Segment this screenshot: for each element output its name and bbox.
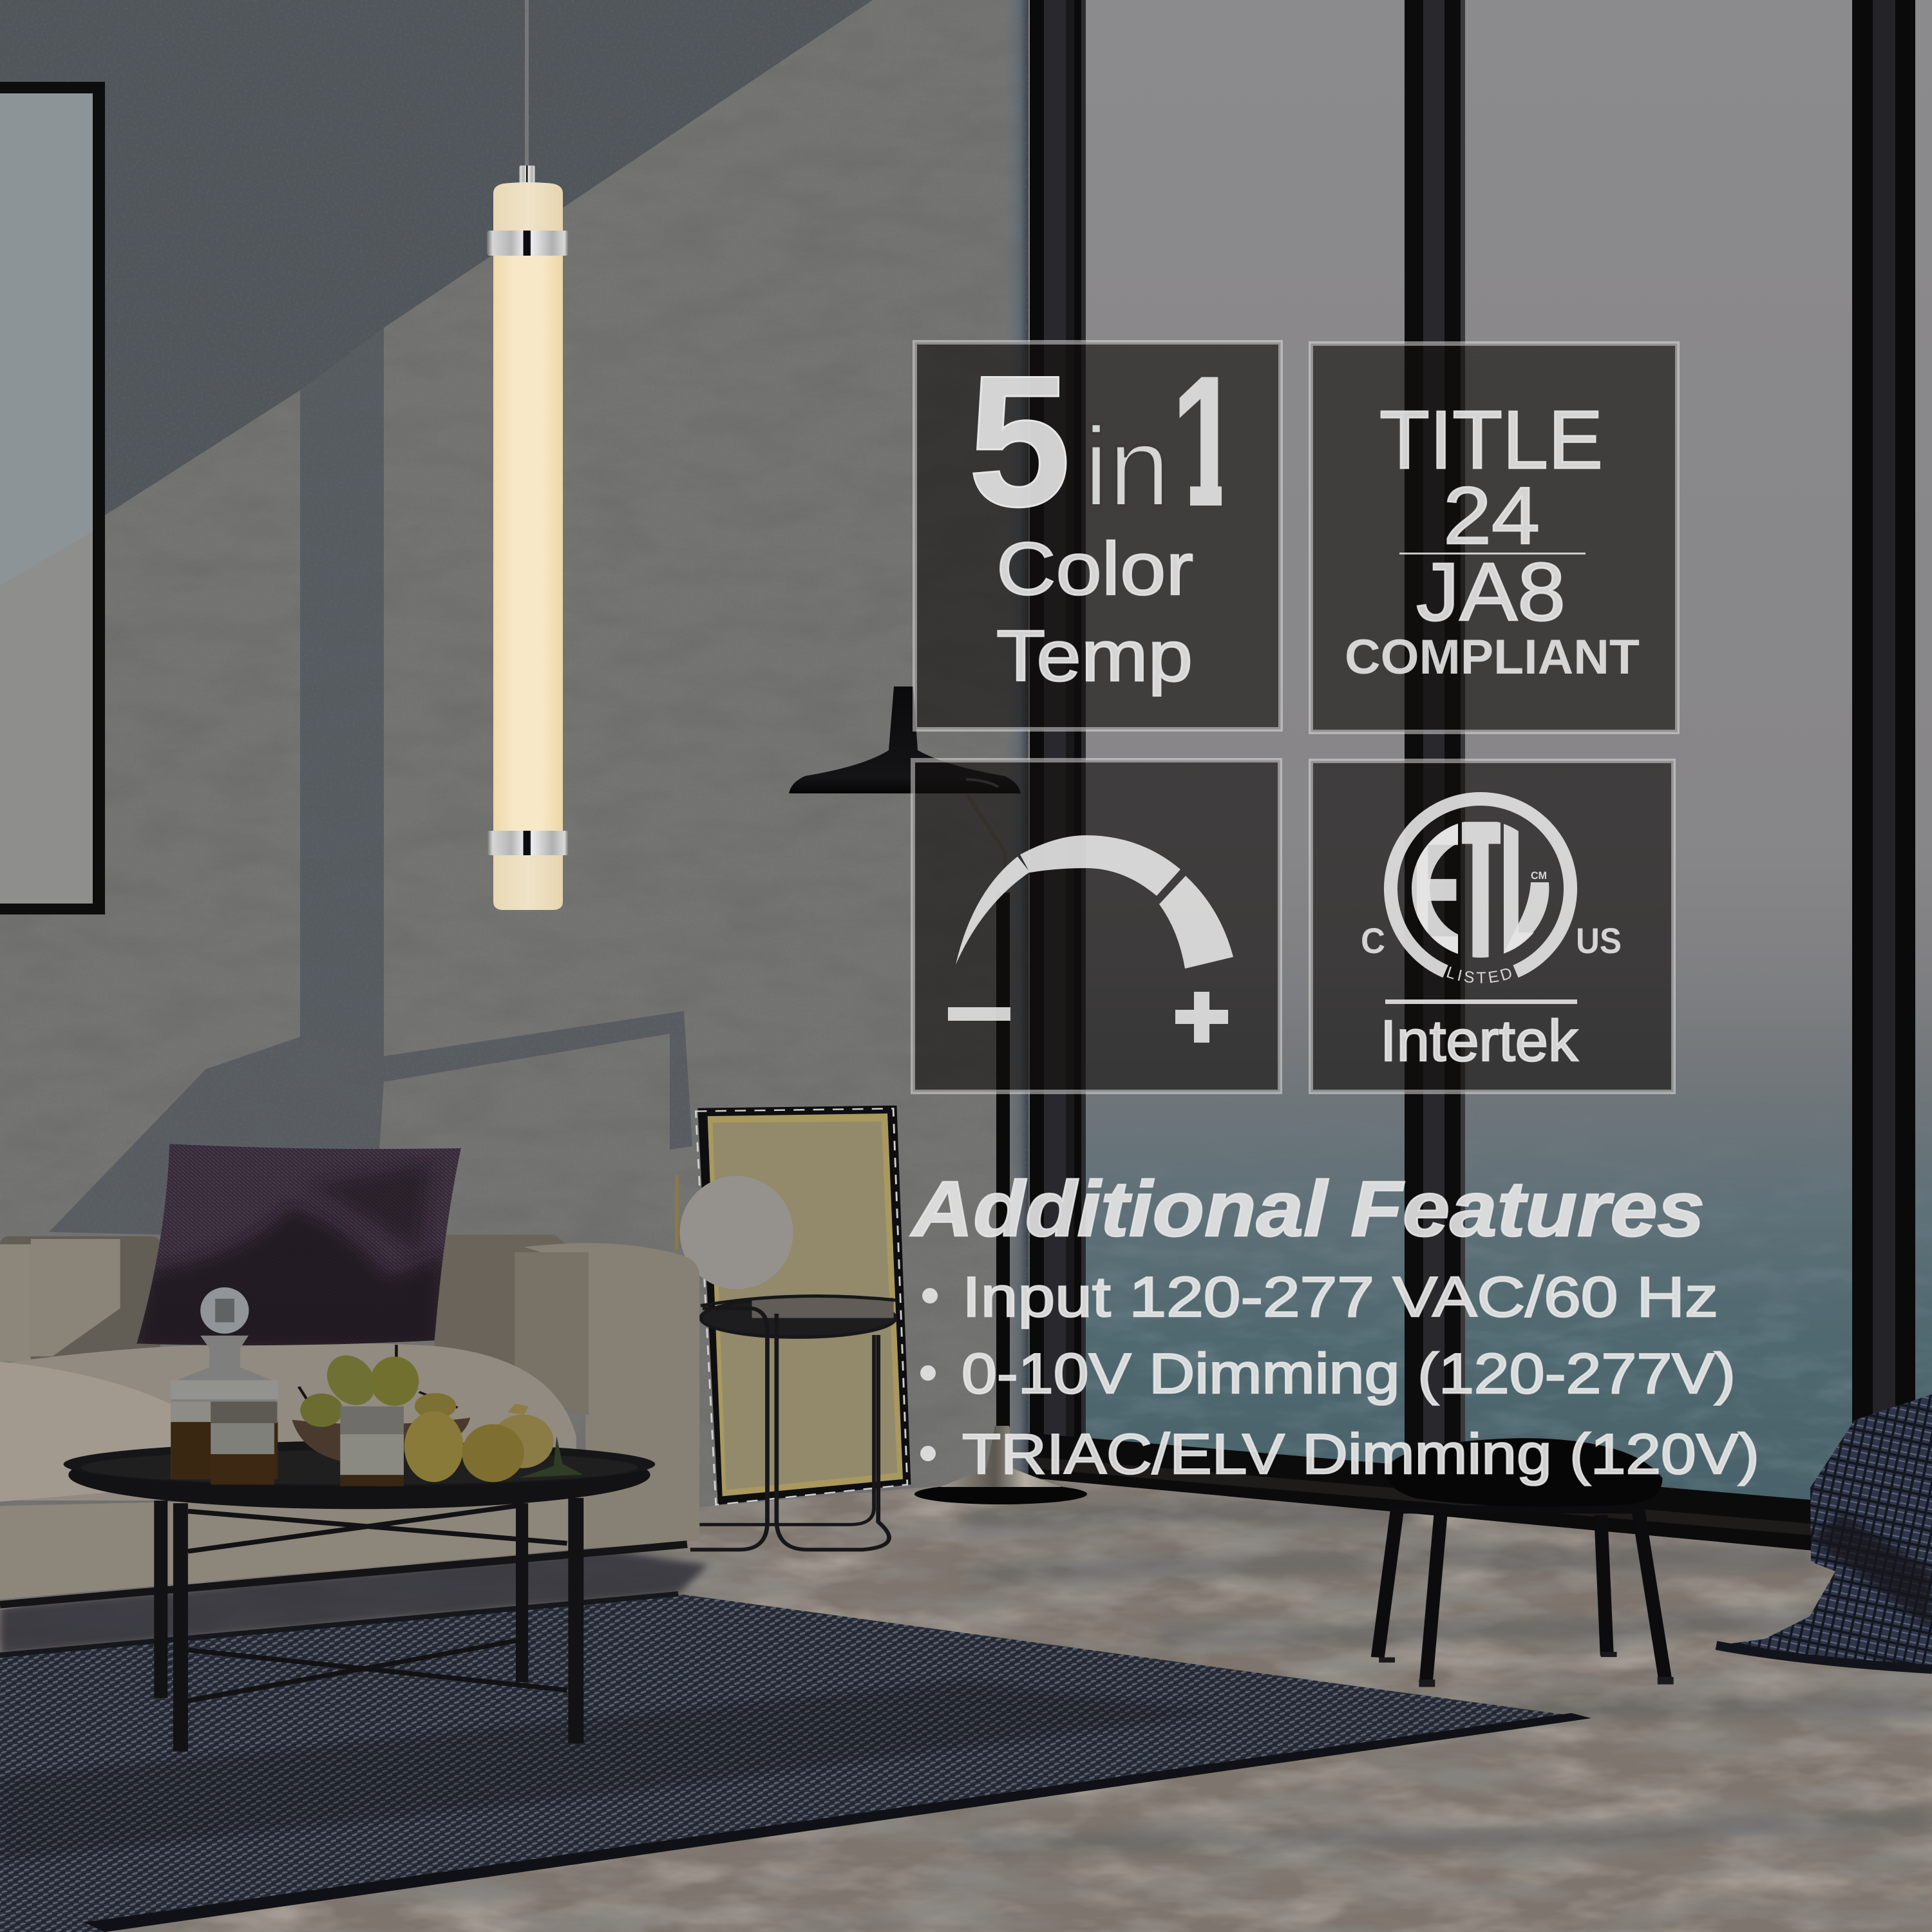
- panel: title 24 ja8 compliant: [1311, 344, 1677, 732]
- label: c: C: [1361, 920, 1385, 961]
- heading: 5 in 1: in: [1084, 404, 1170, 530]
- label: color temp: Temp: [996, 616, 1193, 696]
- panel: 5 in 1 color temp: [914, 337, 1280, 729]
- heading: 5 in 1: 1: [1171, 337, 1242, 545]
- coffee table: [64, 1441, 655, 1752]
- globe table lamp: [675, 1175, 793, 1289]
- icon: etl logo: T: [1446, 779, 1515, 1001]
- feature: input voltage: Input 120-277 VAC/60 Hz: [962, 1265, 1718, 1329]
- fruit bowl: [292, 1345, 583, 1482]
- purple pillow: [129, 1144, 461, 1351]
- icon: dimmer arc: [956, 835, 1233, 969]
- wall art frame: [0, 82, 105, 914]
- floor: [0, 1475, 1932, 1932]
- label: 24: 24: [1443, 470, 1540, 561]
- heading: 5 in 1: 5: [968, 337, 1071, 545]
- label: compliant: COMPLIANT: [1345, 630, 1640, 685]
- label: ja8: JA8: [1416, 546, 1566, 638]
- icon: minus: [948, 1007, 1010, 1021]
- sofa: [0, 1235, 699, 1605]
- label: us: US: [1576, 920, 1622, 961]
- label: title: TITLE: [1379, 394, 1603, 486]
- wall: [0, 0, 1043, 1610]
- feature list: [920, 1265, 1759, 1486]
- canvas leaning on wall: [696, 1106, 911, 1505]
- label: intertek: Intertek: [1380, 1009, 1578, 1074]
- feature: 0-10v dimming: 0-10V Dimming (120-277V): [961, 1341, 1736, 1405]
- heading: additional features: Additional Features: [910, 1165, 1705, 1253]
- icon: etl logo: [1383, 792, 1578, 983]
- label: color temp: [996, 527, 1193, 696]
- icon: etl logo: E: [1412, 781, 1463, 1001]
- side table: [690, 1296, 896, 1549]
- pendant light: [487, 0, 569, 910]
- icon: plus: [1175, 992, 1228, 1043]
- rug: [0, 1594, 1591, 1932]
- floor lamp: [789, 687, 1087, 1504]
- icon: etl logo: CM: [1531, 869, 1547, 882]
- window glass: [1028, 0, 1932, 1565]
- panel: etl listed: [1309, 759, 1676, 1094]
- heading: 5 in 1: [968, 337, 1242, 545]
- icon: etl logo: LISTED: [1446, 966, 1511, 983]
- label: color temp: Color: [996, 527, 1193, 611]
- stool: [1378, 1438, 1674, 1687]
- window frames: [1028, 0, 1932, 1571]
- decanter and glasses: [171, 1287, 404, 1486]
- icon: etl logo: L: [1495, 777, 1562, 996]
- plaid throw blanket: [1716, 1394, 1932, 1669]
- panel: dimming gauge: [913, 760, 1280, 1092]
- feature: triac elv dimming: TRIAC/ELV Dimming (120V): [962, 1422, 1759, 1486]
